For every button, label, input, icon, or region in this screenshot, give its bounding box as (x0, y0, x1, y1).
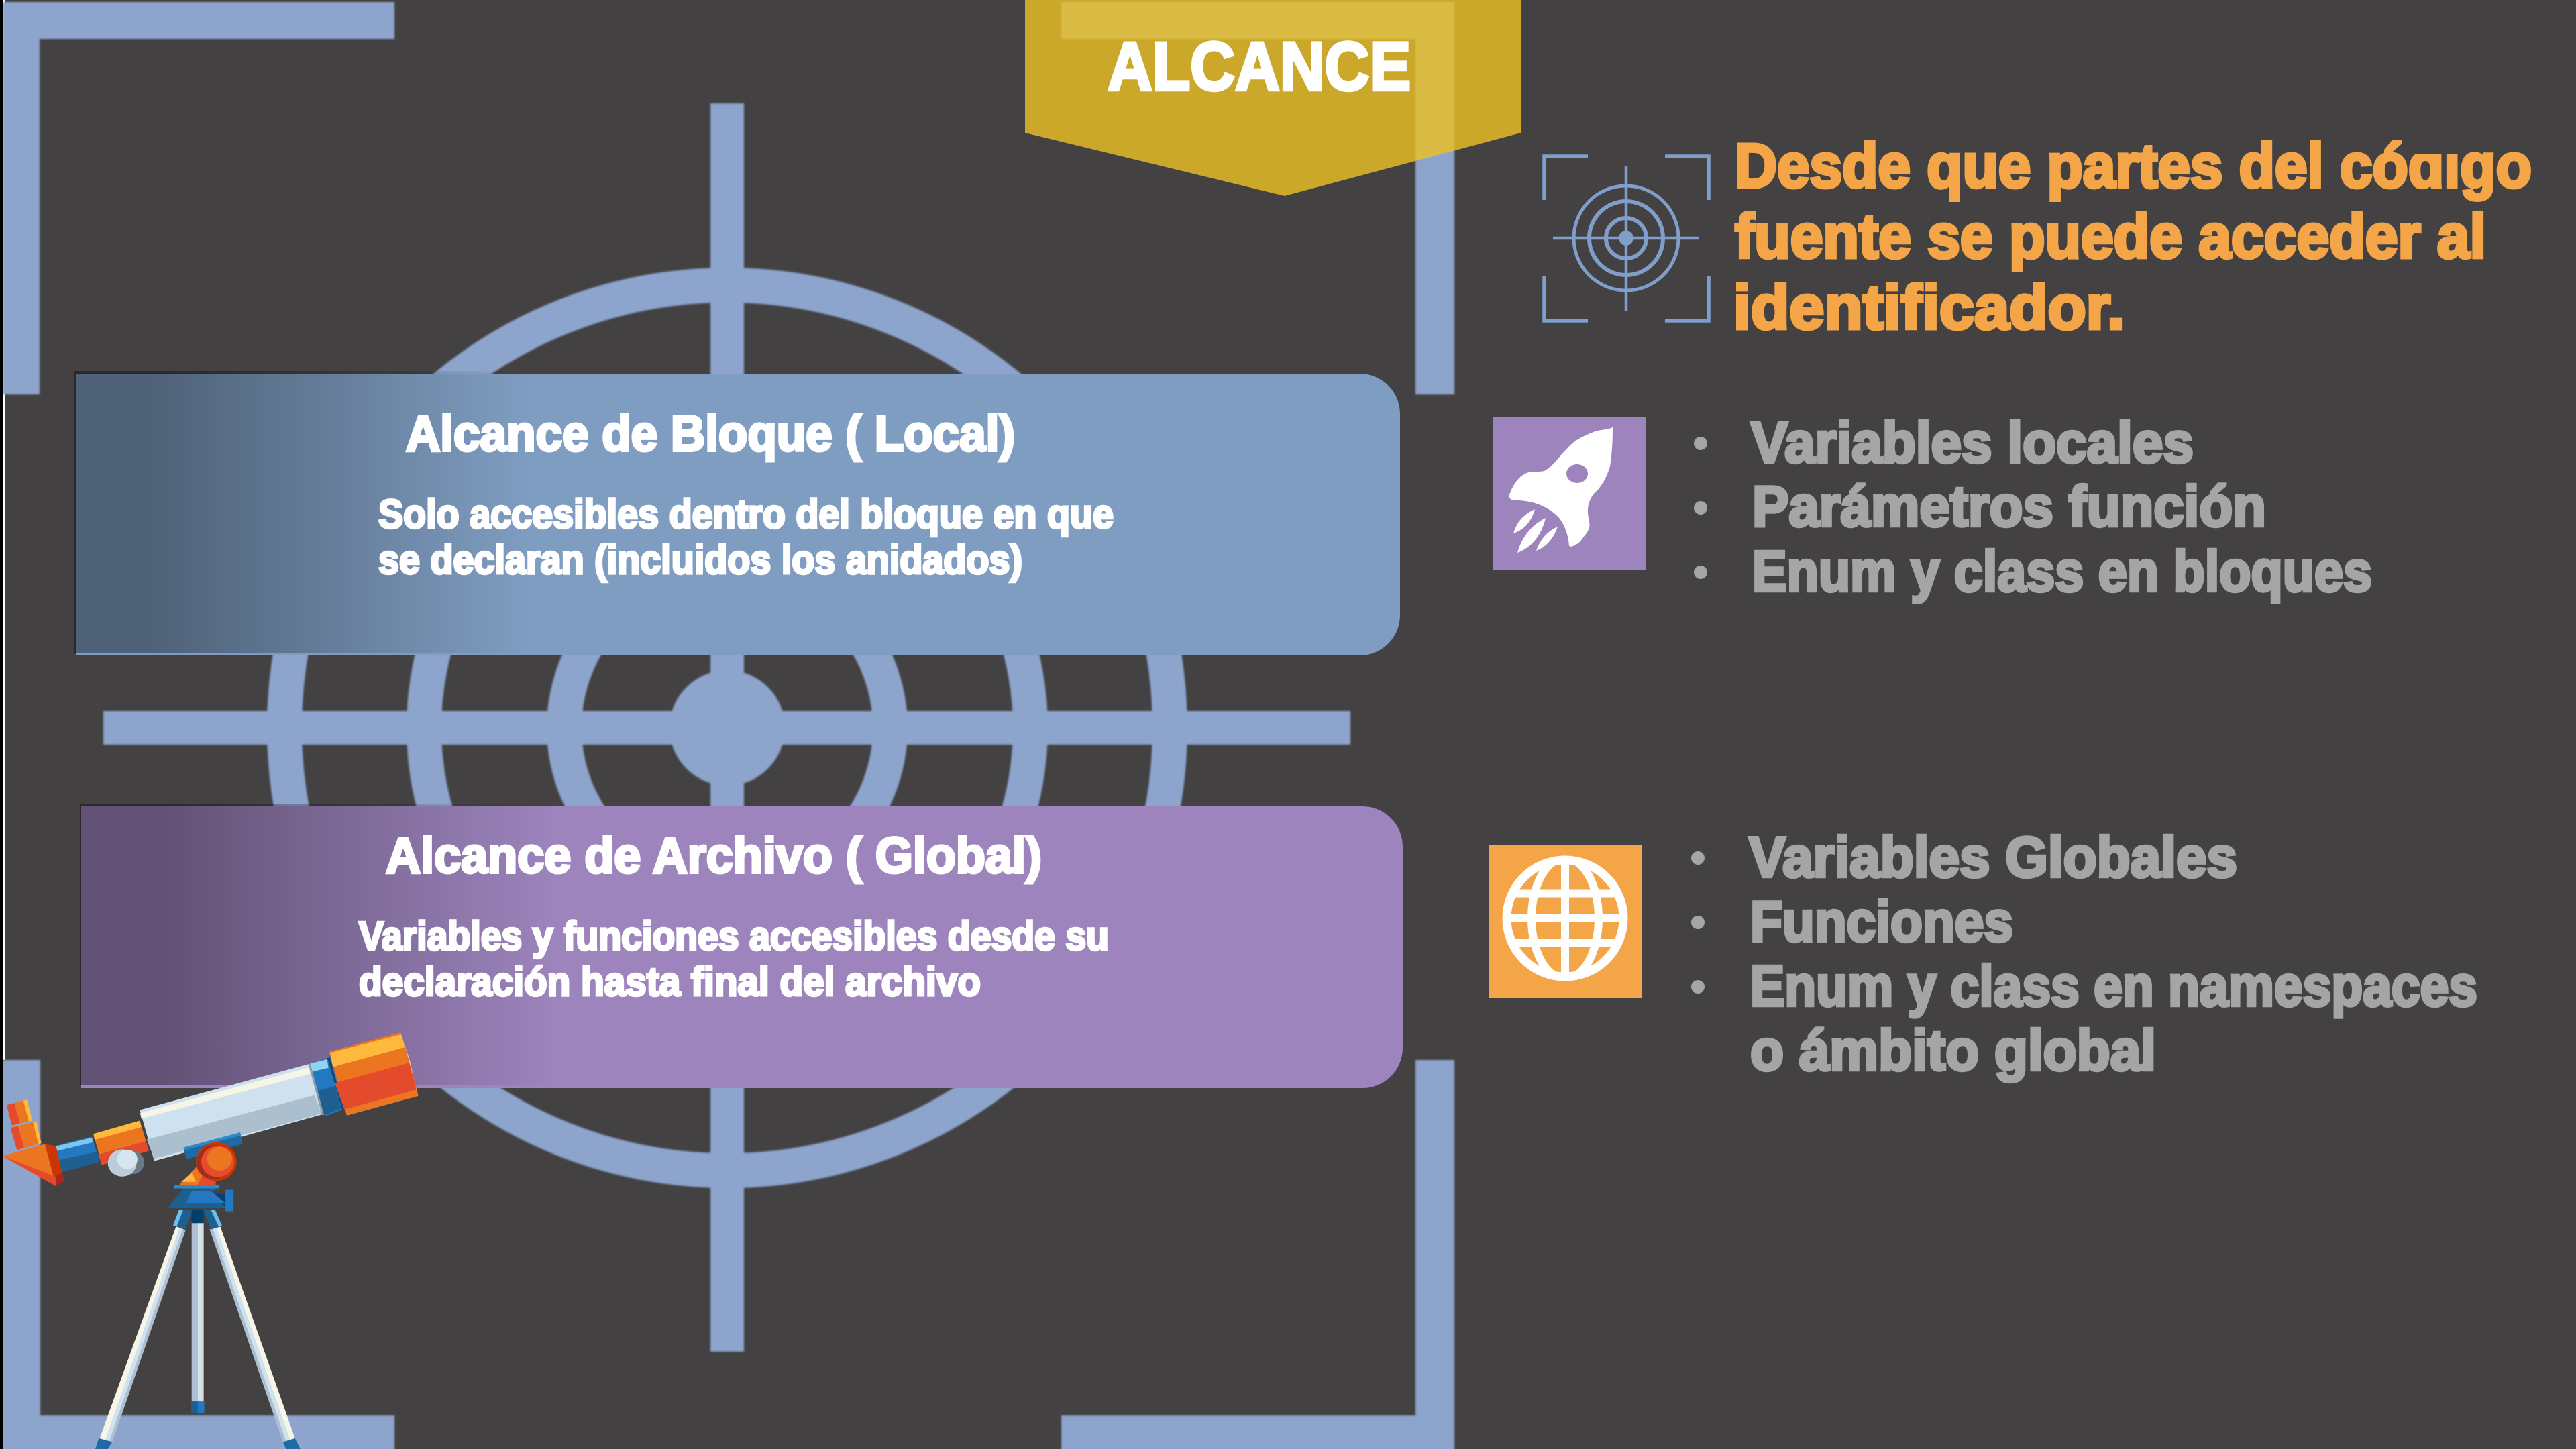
panel text: bloque: se declaran (incluidos los anidados) (378, 537, 1022, 582)
front tube (329, 1032, 419, 1116)
list: bloque: Variables locales (1751, 411, 2194, 475)
focus knob (119, 1150, 144, 1174)
icon: target with brackets (1544, 156, 1709, 321)
mount base (215, 1194, 226, 1208)
illustration: telescope (3, 1032, 419, 1449)
panel text: archivo (359, 914, 1109, 1004)
list: bloque: Parámetros función (1752, 475, 2266, 539)
list: archivo (1691, 826, 2477, 1083)
panel heading: archivo: Alcance de Archivo ( Global) (386, 827, 1042, 883)
left leg (100, 1226, 186, 1442)
heading: definition: Desde que partes del código (1735, 131, 2532, 201)
eyepiece (11, 1122, 42, 1150)
center leg (192, 1222, 198, 1401)
icon: globe (1489, 845, 1642, 998)
panel: alcance de archivo (80, 804, 1403, 1088)
heading: definition: fuente se puede acceder al (1735, 201, 2486, 271)
tube band (309, 1058, 343, 1116)
main tube (140, 1064, 323, 1161)
title: ALCANCE (1108, 28, 1411, 105)
rear tube (93, 1120, 149, 1165)
title ribbon (1025, 0, 1521, 196)
background target crosshair (103, 103, 1350, 1352)
list: bloque: Enum y class en bloques (1752, 540, 2372, 604)
heading: definition: identificador. (1733, 272, 2125, 342)
list: archivo: Funciones (1750, 890, 2013, 954)
heading: definition (1733, 127, 2532, 342)
tube clamp (184, 1132, 243, 1159)
panel text: bloque: Solo accesibles dentro del bloque en que (378, 492, 1114, 537)
icon: rocket (1493, 417, 1646, 570)
altitude knob (196, 1142, 237, 1181)
panel text: bloque (378, 492, 1114, 582)
list: archivo: Enum y class en namespaces (1750, 955, 2477, 1018)
yoke (179, 1167, 215, 1185)
panel heading: bloque: Alcance de Bloque ( Local) (406, 405, 1015, 462)
panel: alcance de bloque (74, 371, 1400, 655)
list: bloque (1694, 411, 2372, 604)
prism (45, 1144, 64, 1186)
list: archivo: Variables Globales (1749, 826, 2237, 890)
right leg (209, 1226, 295, 1442)
list: archivo: o ámbito global (1750, 1019, 2156, 1083)
panel text: archivo: declaración hasta final del archivo (359, 959, 981, 1004)
panel text: archivo: Variables y funciones accesibles desde su (359, 914, 1109, 959)
background viewfinder frame (0, 2, 1454, 1449)
